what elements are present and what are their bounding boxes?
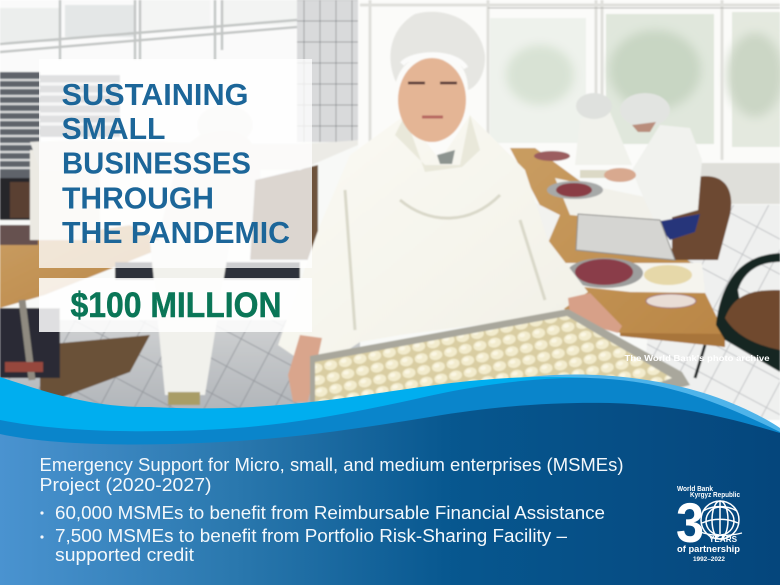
photo: black chair with cushion (695, 253, 780, 378)
photo: right windows (358, 0, 780, 175)
photo: worker in front (604, 93, 702, 240)
logo: World Bank 30 years: YEARS (709, 534, 737, 544)
photo: front table edge (620, 333, 725, 347)
photo: meat plate and dough (563, 258, 705, 308)
photo: left wooden table and pallet (0, 178, 170, 400)
photo credit: The World Bank's photo archive (624, 353, 770, 363)
photo: radiator (700, 163, 780, 204)
logo: globe (700, 501, 742, 539)
logo: World Bank 30 years (676, 486, 742, 563)
amount text: $100 MILLION (70, 286, 282, 325)
photo: tray of dumplings (310, 309, 690, 420)
title text: BUSINESSES (62, 146, 251, 180)
photo: bakery racks (0, 72, 120, 178)
logo: World Bank 30 years: Kyrgyz Republic (690, 492, 740, 499)
title panel (39, 59, 312, 268)
title text: SUSTAINING (62, 77, 248, 112)
photo: left windows (0, 0, 300, 150)
bullet list (40, 503, 605, 565)
wave: mid blue band (0, 378, 780, 460)
photo: hands (288, 293, 622, 402)
logo: World Bank 30 years: World Bank (677, 486, 713, 493)
bottom blue panel (0, 403, 780, 585)
wave: light blue rim on the right (500, 375, 780, 450)
title text: THROUGH (62, 180, 214, 216)
project title: Emergency Support for Micro, small, and medium enterprises (MSMEs) (40, 455, 624, 475)
photo: food production workers with tray of dumplings (0, 0, 780, 420)
photo: floor tiles (0, 205, 780, 420)
wave: bright cyan band (0, 377, 640, 450)
photo: tiled wall column (297, 0, 358, 142)
funding amount panel (39, 278, 312, 332)
photo: metal tray on table (576, 214, 675, 260)
project title: Project (2020-2027) (40, 475, 212, 495)
logo: World Bank 30 years: 1992–2022 (693, 556, 725, 563)
title text: THE PANDEMIC (62, 215, 290, 250)
photo: woman in white coat (278, 12, 588, 360)
project title (40, 455, 624, 495)
bullet list: supported credit (55, 545, 194, 565)
photo: brown chair (672, 176, 731, 260)
photo: background workers (30, 105, 358, 405)
title text (62, 77, 290, 250)
logo: World Bank 30 years: of partnership (677, 544, 741, 554)
logo: numeral 3: 3 (676, 491, 704, 554)
bullet list: 60,000 MSMEs to benefit from Reimbursable Financial Assistance (55, 503, 605, 523)
photo: far table (510, 148, 725, 347)
bullet list: 7,500 MSMEs to benefit from Portfolio Risk-Sharing Facility – (55, 526, 567, 546)
photo: worker in back (575, 93, 632, 165)
title text: SMALL (62, 111, 166, 146)
